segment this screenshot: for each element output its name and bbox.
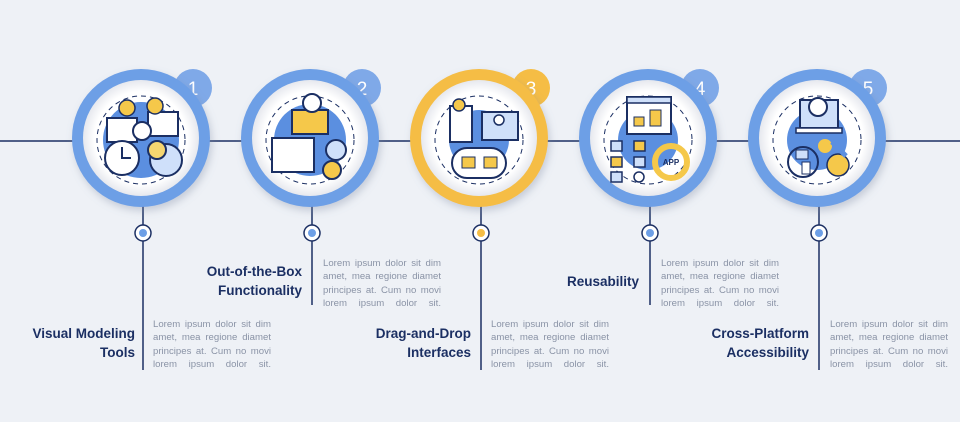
step 1 circle [72,69,212,241]
text 1: Lorem ipsum dolor sit dim amet, mea regione diamet principes at. Cum no movi lorem ipsum dolor sit. [153,319,271,370]
title 3: Interfaces [407,345,471,360]
text 5: Lorem ipsum dolor sit dim amet, mea regione diamet principes at. Cum no movi lorem ipsum dolor sit. [830,319,948,370]
title 1 [32,326,135,360]
text 2: Lorem ipsum dolor sit dim amet, mea regione diamet principes at. Cum no movi lorem ipsum dolor sit. [323,258,441,309]
title 2: Functionality [218,283,302,298]
title 1: Visual Modeling [32,326,135,341]
connector lines [143,200,819,370]
title 5: Cross-Platform [711,326,809,341]
step 5 circle: 5 [863,79,873,100]
title 5: Accessibility [726,345,809,360]
step 2 circle [241,69,381,241]
step 3 circle [410,69,550,241]
step 4 circle: 4 [695,79,706,100]
title 5 [711,326,809,360]
step 1 circle: 1 [188,79,198,100]
step 4 circle: APP [663,158,680,167]
title 3: Drag-and-Drop [376,326,471,341]
title 2 [207,264,302,298]
title 2: Out-of-the-Box [207,264,302,279]
text 4: Lorem ipsum dolor sit dim amet, mea regione diamet principes at. Cum no movi lorem ipsum dolor sit. [661,258,779,309]
step 2 circle: 2 [357,79,367,100]
title 3 [376,326,471,360]
step 3 circle: 3 [526,79,536,100]
title 4: Reusability [567,274,639,289]
step 5 circle [748,69,887,241]
title 1: Tools [100,345,135,360]
step 4 circle [579,69,719,241]
text 3: Lorem ipsum dolor sit dim amet, mea regione diamet principes at. Cum no movi lorem ipsum dolor sit. [491,319,609,370]
